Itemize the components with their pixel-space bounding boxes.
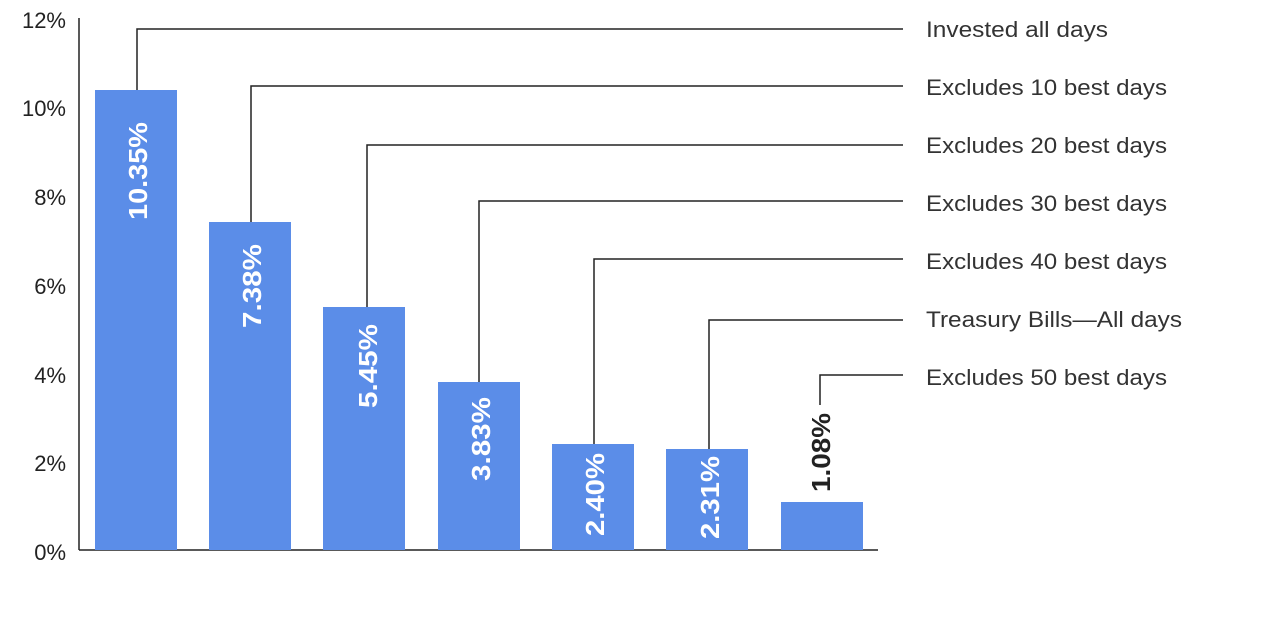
bars [95, 90, 863, 550]
legend labels: Excludes 30 best days [926, 191, 1167, 216]
legend labels: Invested all days [926, 17, 1108, 42]
y-axis labels: 0% [34, 540, 66, 565]
value labels: 10.35% [123, 122, 153, 220]
value labels: 2.31% [695, 456, 725, 539]
y-axis labels: 10% [22, 96, 66, 121]
legend labels: Treasury Bills—All days [926, 307, 1182, 332]
value labels: 3.83% [466, 397, 496, 481]
legend labels: Excludes 10 best days [926, 75, 1167, 100]
legend labels: Excludes 40 best days [926, 249, 1167, 274]
value labels: 2.40% [580, 453, 610, 536]
y-axis labels: 6% [34, 274, 66, 299]
y-axis labels: 4% [34, 363, 66, 388]
leader lines [137, 29, 903, 449]
y-axis labels: 2% [34, 451, 66, 476]
legend labels: Excludes 50 best days [926, 365, 1167, 390]
y-axis labels [22, 8, 66, 565]
legend labels: Excludes 20 best days [926, 133, 1167, 158]
value labels [123, 122, 836, 539]
y-axis labels: 8% [34, 185, 66, 210]
axes [79, 18, 878, 550]
value labels: 1.08% [806, 413, 836, 492]
value labels: 5.45% [353, 324, 383, 408]
legend labels [926, 17, 1182, 390]
y-axis labels: 12% [22, 8, 66, 33]
value labels: 7.38% [237, 244, 267, 328]
